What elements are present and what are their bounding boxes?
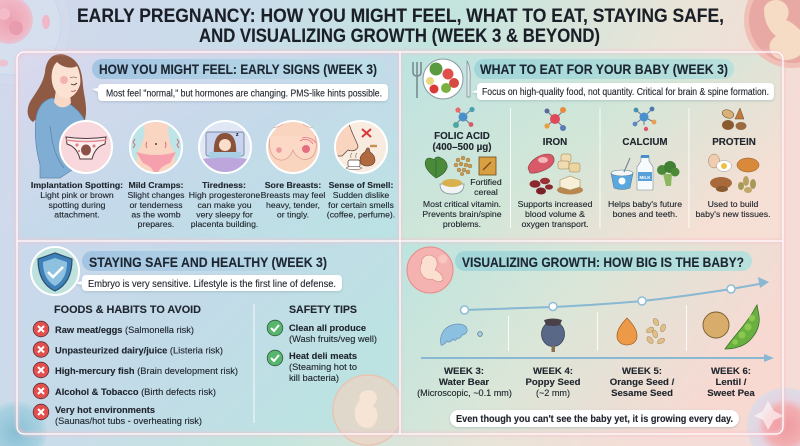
label: fortified cereal: [470, 177, 502, 197]
avoid item: raw meat: Raw meat/eggs (Salmonella risk): [55, 324, 194, 335]
label: week 3: Water Bear: [439, 377, 489, 388]
icon: lentil: [703, 312, 729, 338]
callout: growing every day: [450, 410, 739, 427]
decoration: faint embryo: [333, 375, 403, 445]
label: week 6: [707, 366, 755, 399]
icon: sesame seeds: [645, 317, 667, 345]
caption: sense of smell: Sense of Smell:: [329, 180, 393, 190]
caption: sense of smell: [327, 180, 395, 220]
caption: mild cramps: Mild Cramps:: [128, 180, 184, 190]
caption: implantation spotting: Light pink or brown: [40, 190, 114, 200]
caption: tiredness: [189, 180, 260, 229]
tip: heat deli meats: [267, 350, 357, 383]
icon: iron molecule: [544, 107, 566, 131]
avoid item: alcohol and tobacco: Alcohol & Tobacco (Birth defects risk): [55, 386, 216, 397]
column: folic acid: [422, 107, 502, 229]
caption: tiredness: High progesterone: [189, 190, 260, 200]
speech bubble: early signs intro: Most feel "normal," but hormones are changing. PMS-like hints possible.: [106, 88, 382, 100]
caption: mild cramps: Slight changes: [128, 190, 185, 200]
heading: foods and habits to avoid: FOODS & HABITS TO AVOID: [54, 304, 201, 316]
text: iron description: oxygen transport.: [521, 219, 589, 229]
label: week 5: [610, 366, 675, 399]
title: [77, 6, 724, 47]
caption: sense of smell: (coffee, perfume).: [327, 210, 395, 220]
sign: sense of smell icon: [334, 120, 387, 173]
label: week 5: WEEK 5:: [622, 366, 662, 377]
text: iron description: blood volume &: [525, 209, 585, 219]
tip: heat deli meats: (Steaming hot to: [289, 361, 357, 372]
caption: tiredness: placenta building.: [191, 219, 258, 229]
decoration: cell top-left: [0, 0, 71, 85]
growth curve arrow: [460, 277, 769, 314]
panel: visualizing growth: [400, 241, 783, 434]
avoid item: unpasteurized: Unpasteurized dairy/juice (Listeria risk): [55, 344, 223, 356]
text: iron description: [518, 199, 593, 229]
label: protein: PROTEIN: [712, 137, 756, 148]
label: folic acid: (400–500 µg): [432, 142, 492, 153]
avoid item: alcohol and tobacco: [33, 383, 216, 399]
sign: tiredness icon: [199, 121, 251, 174]
caption: mild cramps: [128, 180, 185, 229]
icon: protein nuts: [721, 108, 746, 130]
icon: folic acid molecule: [453, 107, 475, 128]
label: fortified cereal: cereal: [474, 187, 498, 197]
text: calcium description: Helps baby's future: [608, 199, 682, 209]
avoid item: hot environments: (Saunas/hot tubs - overheating risk): [55, 415, 202, 426]
speech bubble: staying safe intro: Embryo is very sensitive. Lifestyle is the first line of defense.: [88, 279, 336, 290]
caption: implantation spotting: [31, 180, 123, 220]
decoration: embryo top-right: [744, 0, 800, 68]
icon: embryo badge: [407, 247, 453, 293]
icon: sweet pea: [725, 305, 759, 349]
column: protein: [695, 108, 771, 219]
icon: iron foods: [528, 154, 583, 194]
caption: implantation spotting: spotting during: [48, 200, 106, 210]
caption: implantation spotting: attachment.: [54, 210, 100, 220]
text: iron description: Supports increased: [518, 199, 593, 209]
sign: tiredness icon: z: [236, 132, 239, 138]
text: calcium description: [608, 199, 682, 219]
label: week 6: WEEK 6:: [711, 366, 751, 377]
text: folic acid description: [422, 199, 502, 229]
caption: mild cramps: as the womb: [131, 210, 181, 220]
tip: clean produce: Clean all produce: [289, 322, 366, 333]
caption: mild cramps: prepares.: [138, 219, 174, 229]
icon: poppy seed: [542, 318, 564, 352]
icon: folic acid foods: [425, 156, 496, 194]
label: week 5: Orange Seed /: [610, 377, 675, 388]
title: EARLY PREGNANCY: HOW YOU MIGHT FEEL, WHAT TO EAT, STAYING SAFE,: [77, 6, 724, 27]
avoid item: hot environments: Very hot environments: [55, 404, 155, 415]
icon: protein foods: [708, 154, 759, 193]
panel: how you might feel: [17, 52, 400, 241]
heading pill: staying safe: STAYING SAFE AND HEALTHY (WEEK 3): [89, 254, 327, 270]
sign: mild cramps icon: [130, 120, 182, 173]
label: week 4: [526, 366, 581, 398]
heading pill: what to eat: WHAT TO EAT FOR YOUR BABY (WEEK 3): [480, 61, 728, 77]
avoid item: mercury fish: High-mercury fish (Brain development risk): [55, 365, 238, 376]
title: AND VISUALIZING GROWTH (WEEK 3 & BEYOND): [199, 26, 600, 47]
avoid item: raw meat: [33, 321, 194, 337]
text: protein description: baby's new tissues.: [695, 209, 771, 219]
label: week 3: WEEK 3:: [444, 366, 484, 377]
tip: clean produce: [267, 320, 377, 344]
tip: clean produce: (Wash fruits/veg well): [289, 333, 377, 344]
timeline arrow: [421, 354, 774, 362]
label: week 3: [417, 366, 512, 398]
label: iron: IRON: [543, 137, 567, 148]
speech bubble: early signs intro: [92, 84, 388, 101]
label: week 5: Sesame Seed: [611, 388, 673, 399]
panel: staying safe: [0, 241, 403, 446]
caption: mild cramps: or tenderness: [129, 200, 183, 210]
label: week 4: (~2 mm): [536, 388, 570, 398]
tip: heat deli meats: Heat deli meats: [289, 350, 357, 361]
column: iron: [518, 107, 593, 229]
caption: tiredness: very sleepy for: [196, 210, 253, 220]
label: week 4: WEEK 4:: [533, 366, 573, 377]
text: calcium description: bones and teeth.: [613, 209, 677, 219]
caption: implantation spotting: Implantation Spotting:: [31, 180, 123, 190]
panel: what to eat: [400, 52, 783, 241]
text: folic acid description: Prevents brain/spine: [422, 209, 502, 219]
speech bubble: staying safe intro: [75, 275, 342, 291]
callout: growing every day: Even though you can't see the baby yet, it is growing every day.: [456, 414, 733, 425]
caption: sore breasts: Sore Breasts:: [265, 180, 321, 190]
icon: calcium molecule: [633, 107, 656, 131]
avoid item: mercury fish: [33, 362, 238, 378]
caption: sore breasts: or tingly.: [277, 210, 309, 220]
label: week 6: Lentil /: [716, 377, 747, 388]
text: folic acid description: Most critical vitamin.: [423, 199, 501, 209]
decoration: cell bottom-right: [747, 388, 800, 446]
label: week 6: Sweet Pea: [707, 388, 755, 399]
divider: [253, 304, 255, 423]
caption: tiredness: can make you: [197, 200, 252, 210]
caption: sore breasts: [261, 180, 325, 220]
heading: safety tips: SAFETY TIPS: [289, 304, 357, 316]
icon: plate with fork and knife: [413, 59, 470, 99]
heading pill: visualizing growth: VISUALIZING GROWTH: HOW BIG IS THE BABY?: [462, 254, 744, 270]
text: protein description: [695, 199, 771, 219]
text: protein description: Used to build: [708, 199, 759, 209]
dividers: [508, 305, 686, 351]
speech bubble: what to eat intro: [471, 83, 774, 100]
avoid item: hot environments: [33, 404, 202, 426]
caption: sense of smell: for certain smells: [328, 200, 394, 210]
column: calcium: [608, 107, 682, 219]
label: folic acid: FOLIC ACID: [434, 131, 490, 142]
dividers: [510, 108, 689, 228]
label: week 4: Poppy Seed: [526, 377, 581, 388]
text: folic acid description: problems.: [443, 219, 481, 229]
icon: shield badge: [31, 247, 79, 295]
label: fortified cereal: Fortified: [470, 177, 502, 187]
sign: sore breasts icon: [267, 121, 319, 173]
icon: orange seed: [617, 318, 637, 345]
tip: heat deli meats: kill bacteria): [289, 372, 339, 383]
icon: calcium foods: MILK: [640, 175, 651, 180]
decoration: cell bottom-left: [0, 401, 47, 446]
heading pill: early signs: HOW YOU MIGHT FEEL: EARLY SIGNS (WEEK 3): [99, 61, 377, 77]
caption: tiredness: Tiredness:: [202, 180, 246, 190]
icon: water bear: [440, 324, 482, 345]
label: folic acid: [432, 131, 492, 153]
label: week 3: (Microscopic, ~0.1 mm): [417, 388, 512, 398]
sign: implantation spotting icon: [60, 121, 112, 173]
illustration: woman: [28, 54, 88, 178]
caption: sore breasts: Breasts may feel: [261, 190, 325, 200]
label: calcium: CALCIUM: [622, 137, 668, 148]
caption: sore breasts: heavy, tender,: [266, 200, 320, 210]
caption: sense of smell: Sudden dislike: [333, 190, 389, 200]
avoid item: unpasteurized: [33, 342, 223, 357]
